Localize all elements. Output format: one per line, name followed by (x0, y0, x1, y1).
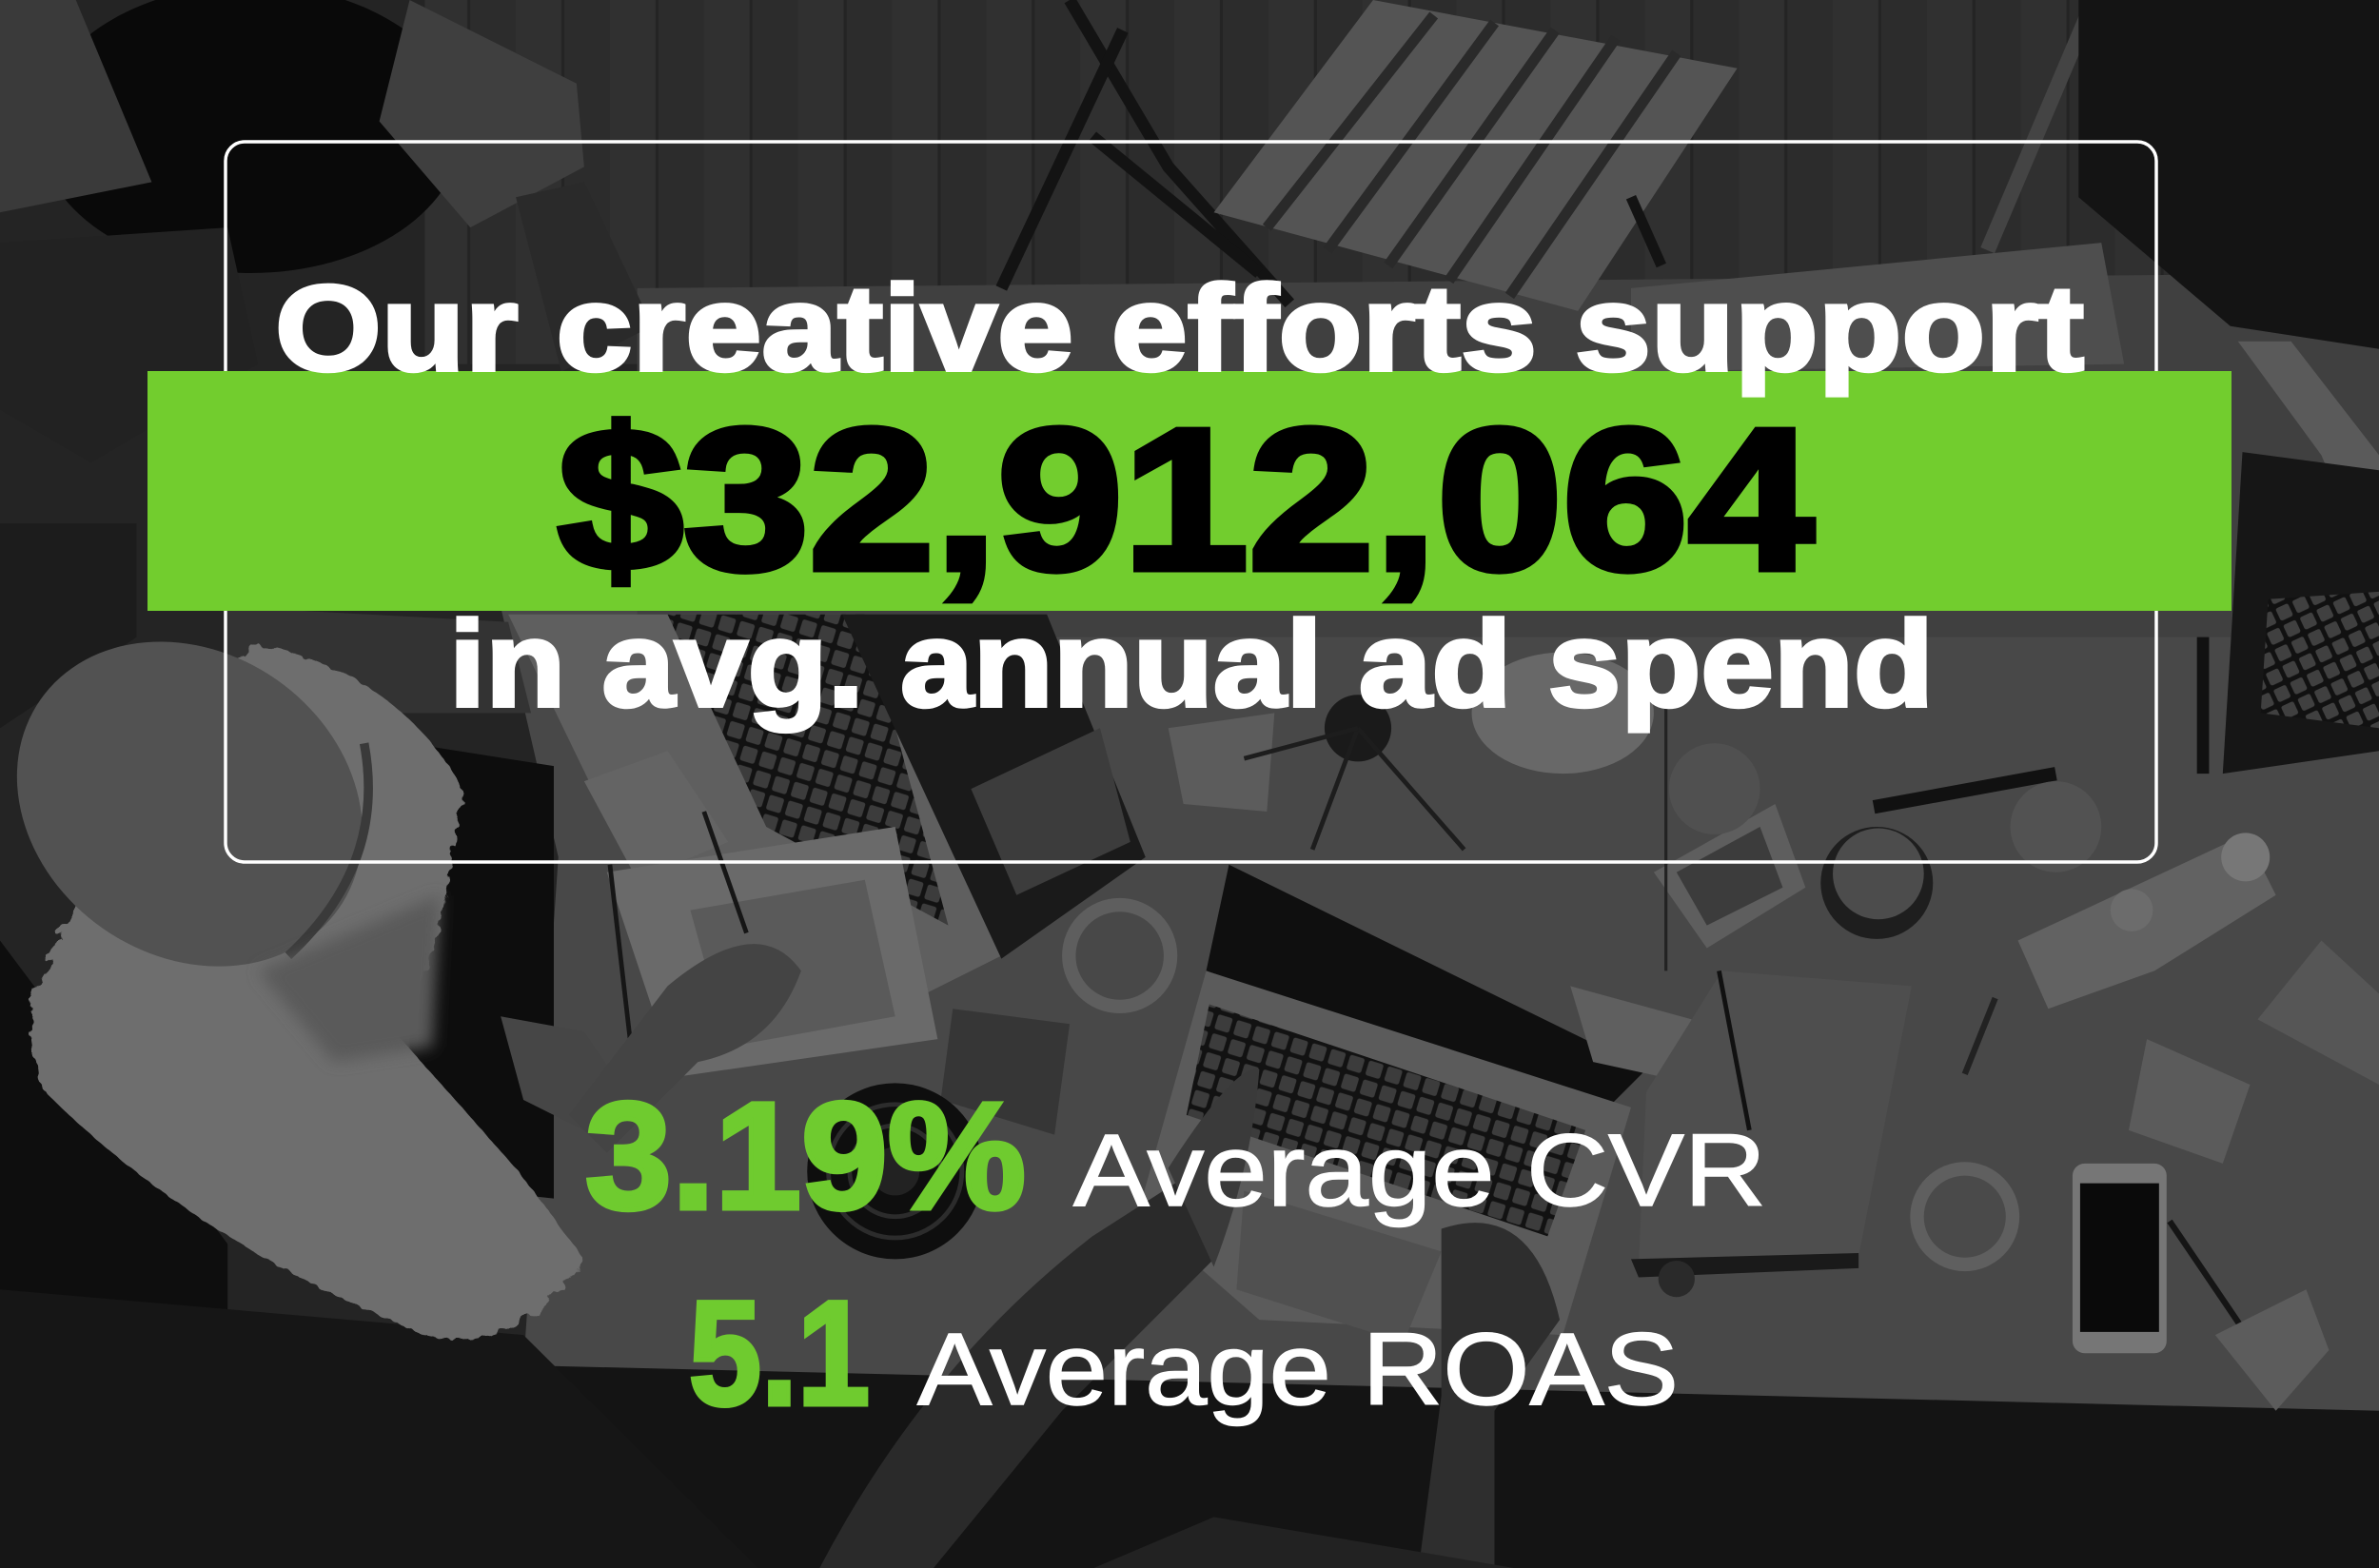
stat: average CVR: Average CVR (1073, 1112, 1766, 1227)
heading line: Our creative efforts support: Our creative efforts support (275, 261, 2084, 397)
stat: average ROAS: 5.1 (689, 1271, 870, 1437)
big number: ad spend amount: $32,912,064 (558, 386, 1814, 612)
stat: average CVR (585, 1070, 1766, 1241)
stat: average CVR: 3.19% (585, 1070, 1026, 1241)
stat: average ROAS (689, 1271, 1679, 1437)
stat: average ROAS: Average ROAS (917, 1311, 1679, 1426)
panel: rounded white outline frame (226, 142, 2156, 862)
green highlight bar (147, 371, 2232, 611)
heading line: in avg. annual ad spend: in avg. annual ad spend (449, 597, 1934, 733)
